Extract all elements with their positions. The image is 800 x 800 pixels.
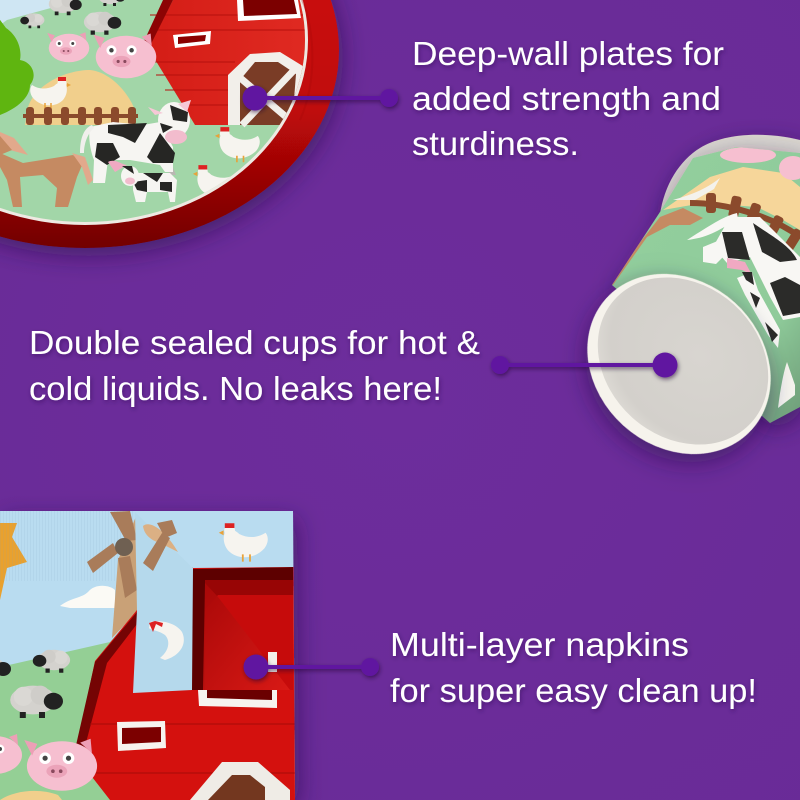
barn [74,567,295,800]
sheep [0,650,70,718]
text: plates: sturdiness. [412,125,579,162]
plate artwork [0,0,310,230]
flap windmill [143,520,178,571]
pigs [47,32,156,78]
text: plates: added strength and [412,80,721,117]
windmill [87,511,137,638]
calf [121,166,177,202]
cow [80,100,191,183]
hen on cup [673,178,720,200]
calf on cup [737,272,780,348]
barn [140,0,310,125]
cup base inner [564,243,800,479]
hen on cup [778,362,795,408]
plate white inner edge [0,0,308,225]
hen on hay [30,77,71,109]
napkin lower window [198,690,277,708]
sheep group [20,0,125,35]
barn window [117,721,166,751]
top hen [219,523,268,562]
text: cups: cold liquids. No leaks here! [29,370,442,407]
hay pile [25,70,135,125]
text: cups: Double sealed cups for hot & [29,324,480,361]
folded corner opening [192,567,293,690]
text: napkins: Multi-layer napkins [390,626,689,663]
flap hen [149,621,184,660]
horse [0,132,93,207]
shine [300,0,312,120]
hens right [193,127,260,200]
horse on cup [608,208,703,285]
top right corner panel [192,567,291,568]
fence [690,193,800,250]
tree [0,13,34,115]
text: plates [412,35,724,162]
callout: napkins connector [244,654,379,680]
folded flap [133,512,193,693]
fence [23,107,138,125]
napkin base [0,511,295,800]
door [190,762,290,800]
sun [0,523,27,600]
hay [663,167,800,230]
cow on cup [687,213,800,320]
plate rim [0,0,339,248]
text: cups [29,324,480,407]
text: napkins: for super easy clean up! [390,672,757,709]
napkin artwork [0,511,295,800]
panel: paper cup [574,131,800,474]
pigs [0,734,97,791]
callout: cups connector [491,352,678,378]
ground [0,632,120,800]
sky rib texture [0,523,25,581]
text: napkins [390,626,757,709]
cup artwork [608,147,800,408]
cloud [60,586,115,608]
cup rim [660,135,800,215]
cup base outer [551,237,800,491]
panel: paper plate [0,0,339,248]
panel: napkin [0,511,295,800]
cup body [612,147,800,423]
callout: plates connector [242,86,398,110]
pigs on cup [720,147,800,180]
text: plates: Deep-wall plates for [412,35,724,72]
hay [0,791,62,800]
